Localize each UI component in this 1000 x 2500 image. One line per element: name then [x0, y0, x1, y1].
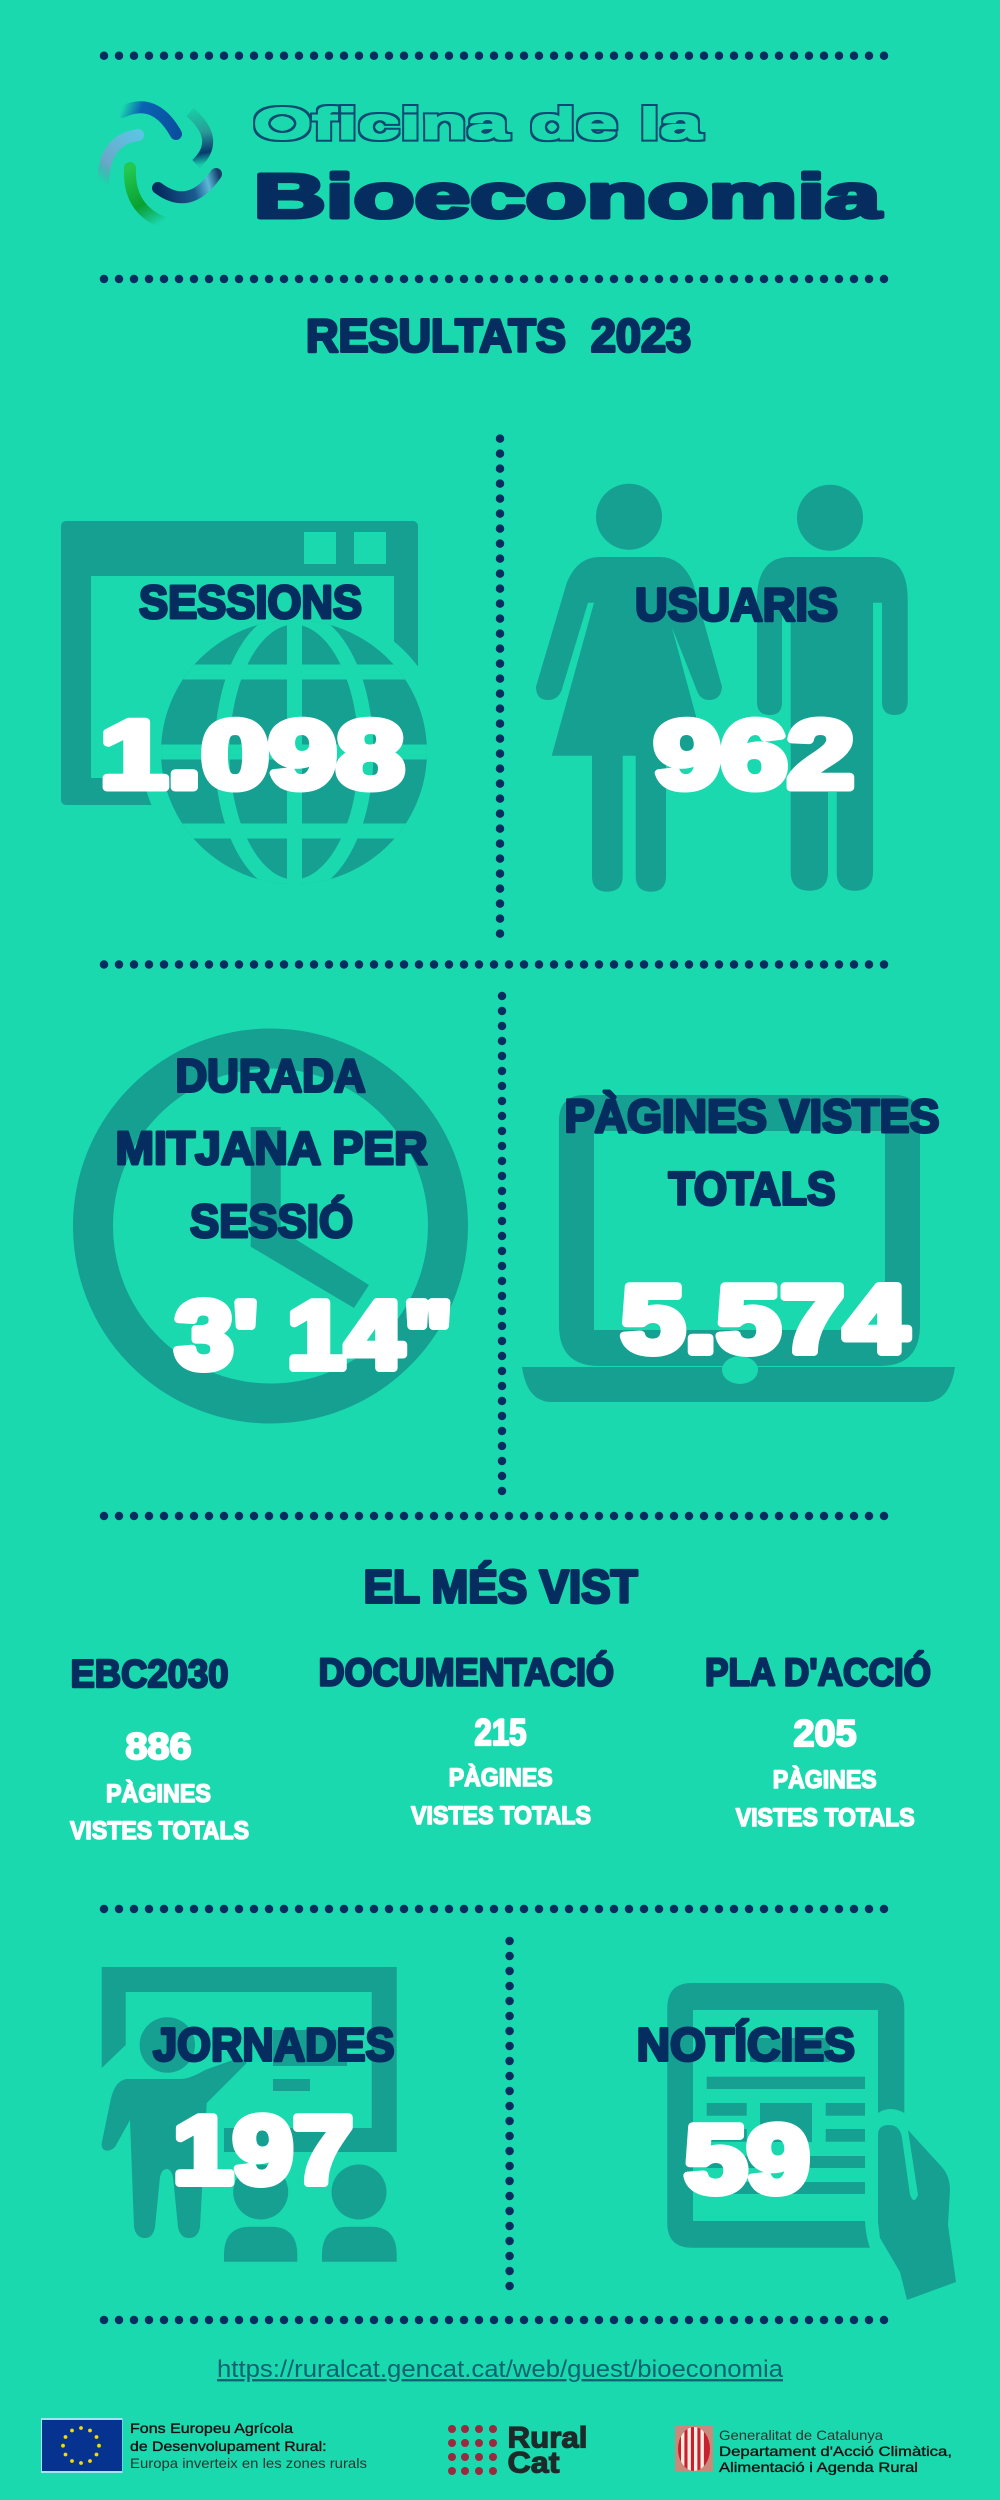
column: documentation [318, 1650, 614, 1830]
panel: news [637, 1983, 956, 2300]
footer: Rural Cat logo [448, 2422, 588, 2480]
icon: clock [93, 1048, 448, 1404]
column: action plan: PLA D'ACCIÓ [705, 1650, 931, 1694]
column: action plan: PÀGINES [773, 1765, 877, 1794]
label: total page views: PÀGINES VISTES [564, 1090, 940, 1142]
number: news: 59 [684, 2106, 810, 2213]
footer: EU funding logo [41, 2418, 367, 2473]
panel: events [102, 1967, 397, 2262]
icon: tablet held in hand [667, 1983, 956, 2300]
label: news: NOTÍCIES [637, 2018, 855, 2070]
label: total page views [564, 1090, 940, 1214]
label: events: JORNADES [153, 2018, 394, 2070]
column: documentation: DOCUMENTACIÓ [318, 1650, 614, 1694]
icon: browser and globe [61, 521, 447, 898]
column: EBC2030: VISTES TOTALS [70, 1817, 249, 1845]
title: RESULTATS 2023 [306, 310, 691, 362]
organisation name, solid line: Bioeconomia [254, 162, 881, 232]
wordmark: Rural Cat: Rural [508, 2422, 588, 2454]
label: sessions: SESSIONS [139, 576, 362, 628]
panel: total page views [522, 1090, 955, 1402]
text: EU fund [130, 2420, 367, 2471]
number: total page views: 5.574 [621, 1266, 908, 1373]
label: users: USUARIS [635, 578, 838, 630]
heading: most viewed: EL MÉS VIST [364, 1560, 638, 1612]
header: logo and name [103, 100, 881, 232]
number: events: 197 [173, 2097, 353, 2204]
icon: woman and man [536, 484, 908, 892]
icon: EU flag [41, 2418, 122, 2473]
column: EBC2030 [70, 1653, 249, 1845]
footer: Generalitat logo [675, 2426, 952, 2475]
number: duration: 3' 14" [175, 1282, 453, 1389]
column: documentation: 215 [474, 1712, 526, 1753]
text: department: Generalitat de Catalunya [719, 2427, 883, 2443]
column: documentation: PÀGINES [449, 1763, 553, 1792]
wordmark: Rural Cat [508, 2422, 588, 2480]
text: department: Departament d'Acció Climàtica, [719, 2443, 952, 2459]
website link: https://ruralcat.gencat.cat/web/guest/bioeconomia [217, 2356, 784, 2383]
number: users: 962 [654, 702, 854, 808]
label: duration: MITJANA PER [116, 1122, 428, 1174]
label: duration: DURADA [176, 1050, 366, 1102]
number: sessions: 1.098 [100, 702, 404, 808]
panel: users [536, 484, 908, 892]
text: department [719, 2427, 952, 2475]
label: total page views: TOTALS [668, 1162, 836, 1214]
column: EBC2030: 886 [126, 1726, 192, 1767]
label: duration [116, 1050, 428, 1247]
text: EU fund: de Desenvolupament Rural: [130, 2438, 326, 2454]
icon: laptop [522, 1095, 955, 1402]
icon: swirl logo [103, 107, 216, 222]
panel: average session duration [93, 1048, 453, 1404]
wordmark: Rural Cat: Cat [508, 2446, 560, 2480]
panel: sessions [61, 521, 447, 898]
column: action plan [705, 1650, 931, 1832]
column: EBC2030: EBC2030 [70, 1653, 228, 1696]
column: documentation: VISTES TOTALS [411, 1802, 591, 1830]
section: most viewed [70, 1560, 931, 1845]
label: duration: SESSIÓ [190, 1195, 353, 1247]
icon: coat of arms [675, 2426, 713, 2472]
column: EBC2030: PÀGINES [106, 1779, 211, 1808]
icon: presenter and audience [102, 1967, 397, 2262]
text: department: Alimentació i Agenda Rural [719, 2459, 918, 2475]
column: action plan: 205 [794, 1713, 856, 1754]
organisation name, outlined line: Oficina de la [253, 100, 703, 149]
icon: dot grid [448, 2425, 497, 2475]
text: EU fund: Fons Europeu Agrícola [130, 2420, 293, 2436]
column: action plan: VISTES TOTALS [736, 1804, 915, 1832]
text: EU fund: Europa inverteix en les zones rurals [130, 2455, 367, 2471]
